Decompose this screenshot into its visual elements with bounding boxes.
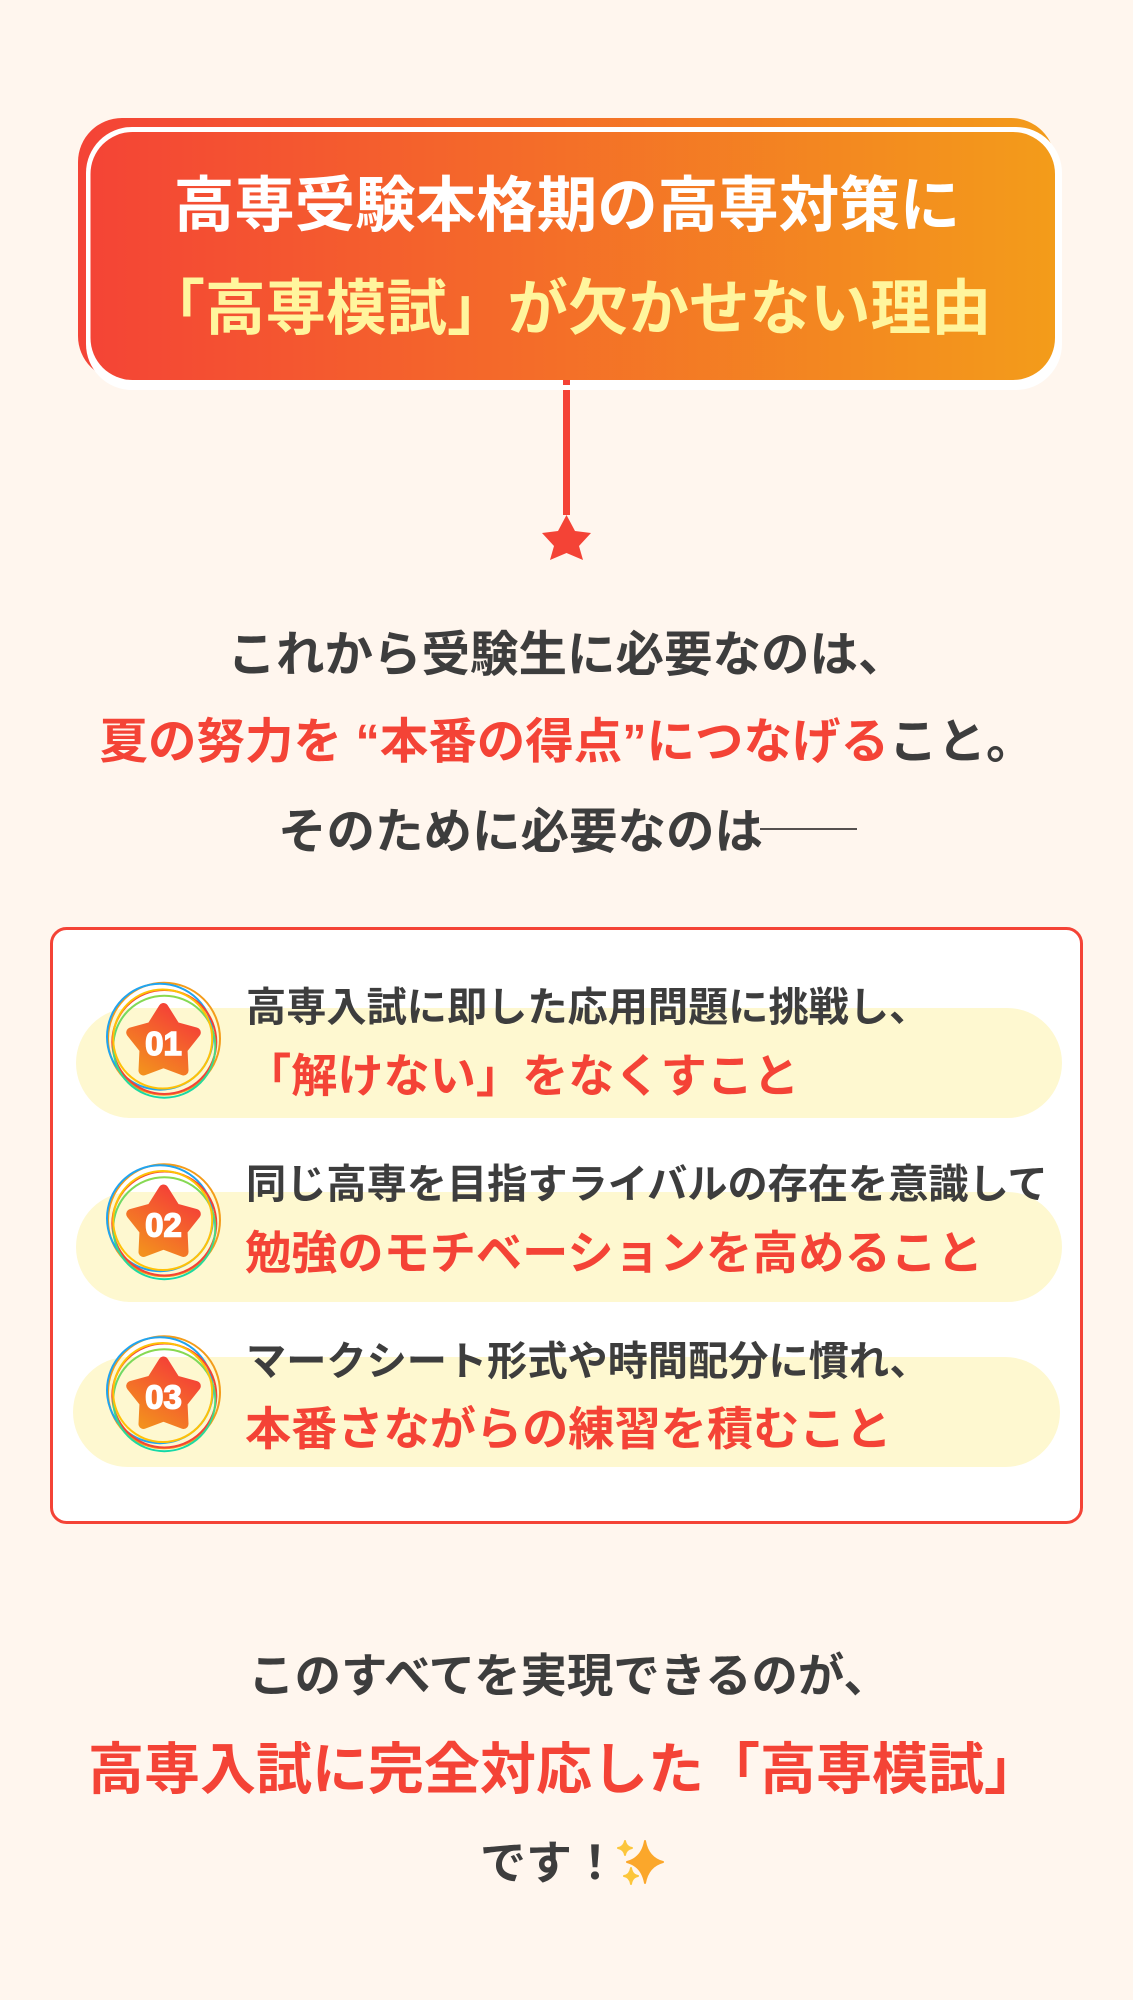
title line 2: 「高専模試」が欠かせない理由 xyxy=(144,274,992,342)
intro line 3: そのために必要なのは xyxy=(278,805,763,859)
item 02 xyxy=(76,1162,1062,1302)
closing text xyxy=(88,1650,1040,1889)
item 03 emphasis: 本番さながらの練習を積むこと xyxy=(245,1403,892,1455)
closing line 3: です！ xyxy=(480,1837,618,1889)
highlight pill 01 xyxy=(76,1008,1062,1118)
closing line 1: このすべてを実現できるのが、 xyxy=(248,1650,890,1702)
badge 03 xyxy=(107,1336,220,1451)
item 01 emphasis: 「解けない」をなくすこと xyxy=(245,1050,799,1102)
title banner xyxy=(78,118,1062,390)
intro text xyxy=(100,628,1034,859)
title line 1: 高専受験本格期の高専対策に xyxy=(174,171,960,239)
panel: three requirements xyxy=(52,928,1082,1522)
highlight pill 02 xyxy=(76,1192,1062,1302)
intro line 2: 夏の努力を “本番の得点”につなげること。 xyxy=(100,715,1034,769)
badge 01 xyxy=(107,983,220,1098)
item 03 xyxy=(73,1336,1060,1467)
icon: sparkles xyxy=(618,1841,663,1884)
intro line 1: これから受験生に必要なのは、 xyxy=(227,628,907,682)
badge 01: 01 xyxy=(145,1025,182,1062)
highlight pill 03 xyxy=(73,1357,1060,1467)
closing line 2: 高専入試に完全対応した「高専模試」 xyxy=(88,1738,1040,1801)
badge 02 xyxy=(107,1164,220,1279)
item 03 text: マークシート形式や時間配分に慣れ、 xyxy=(246,1339,930,1384)
item 01 xyxy=(76,983,1062,1118)
item 01 text: 高専入試に即した応用問題に挑戦し、 xyxy=(246,985,929,1030)
badge 03: 03 xyxy=(145,1378,182,1416)
badge 02: 02 xyxy=(145,1206,182,1244)
item 02 emphasis: 勉強のモチベーションを高めること xyxy=(245,1227,983,1279)
connector line with star xyxy=(542,380,591,560)
item 02 text: 同じ高専を目指すライバルの存在を意識して xyxy=(246,1162,1048,1207)
